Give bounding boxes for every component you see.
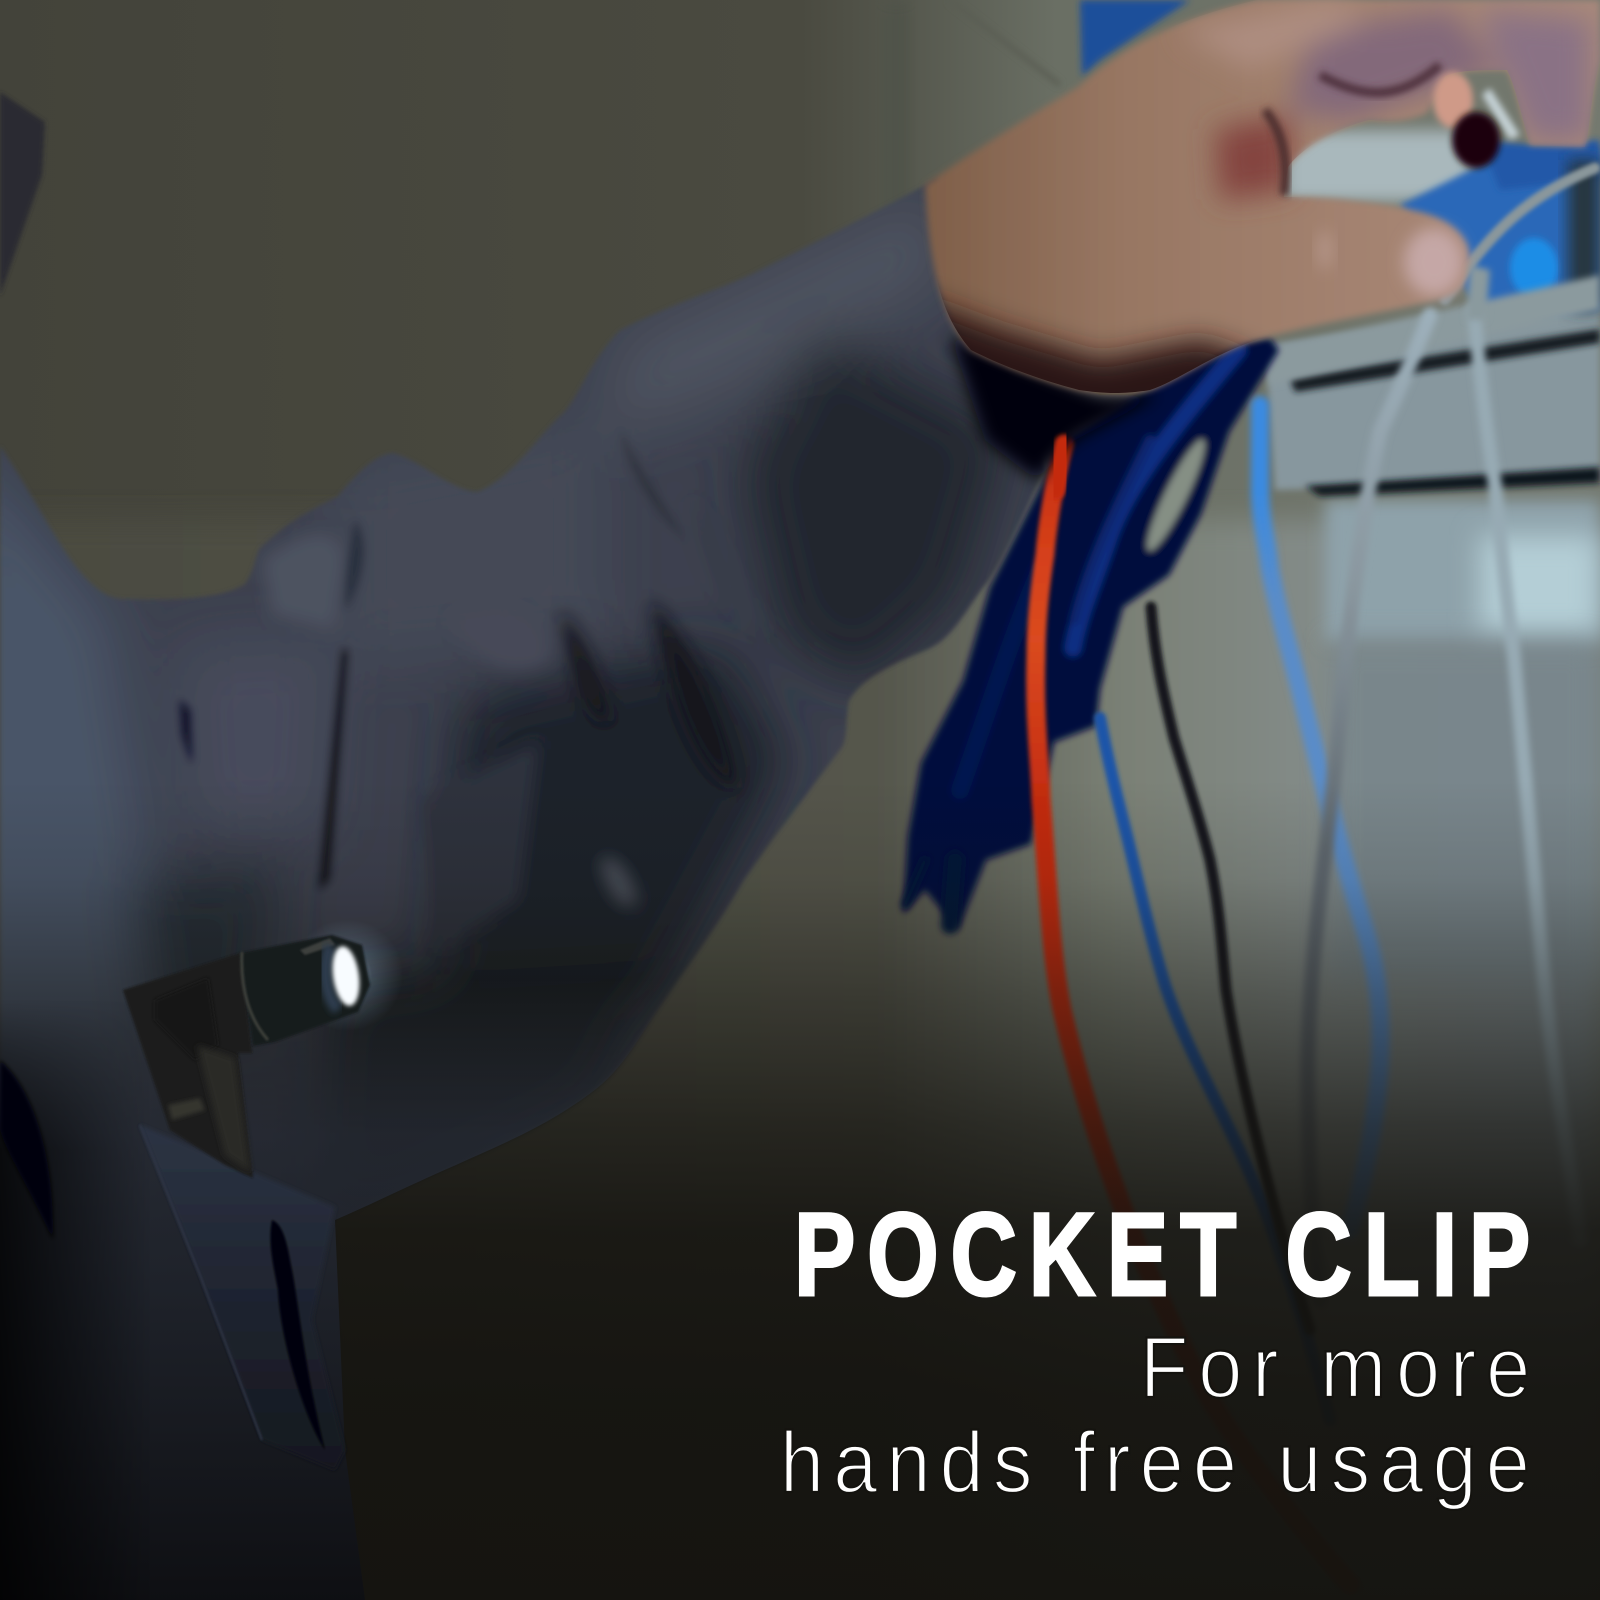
clip body <box>123 953 253 1178</box>
flashlight with pocket clip <box>123 919 403 1178</box>
pocket: dark slit <box>270 1220 325 1450</box>
shirt pocket <box>0 1060 345 1470</box>
sleeve fold details <box>262 534 736 930</box>
left edge vignette <box>0 1027 119 1600</box>
sleeve soft shading <box>0 196 1026 1100</box>
subheading line: For more: For more <box>1140 1319 1530 1416</box>
pocket: seam <box>140 1125 262 1440</box>
cable connector strain relief <box>1466 265 1490 320</box>
lens <box>329 944 363 1008</box>
cable: blue bundle <box>903 338 1279 930</box>
left black fold <box>0 1060 53 1240</box>
figure: shirt and sleeve <box>0 185 1044 1116</box>
hand: dark fingernail shadow <box>1452 112 1500 168</box>
cable: red <box>1036 444 1350 1585</box>
cable: light blue <box>1260 405 1381 1230</box>
heading and subheading text <box>780 1189 1530 1511</box>
rack: bottom dark edge <box>1305 467 1600 496</box>
light glow <box>291 919 403 1031</box>
cable: grey right <box>1474 310 1580 1240</box>
shadow under cuff <box>950 335 1160 480</box>
cable: red over shadow <box>1056 444 1064 490</box>
light barrel <box>240 935 370 1046</box>
hand: tone patches <box>940 0 1596 393</box>
subheading line: hands free usage: hands free usage <box>780 1414 1530 1511</box>
hand: finger creases <box>1320 65 1440 93</box>
hand: fingertip <box>1433 72 1473 128</box>
cable: blue thin <box>1100 718 1330 1420</box>
cable: black <box>1151 607 1310 1330</box>
hand: white gap <box>1482 88 1520 140</box>
cable: grey upper loop <box>1445 168 1595 300</box>
rack: top dark edge <box>1290 329 1600 392</box>
heading: POCKET CLIP: POCKET CLIP <box>794 1189 1530 1321</box>
cable: grey left <box>1308 315 1430 1300</box>
cable: blue bundle frayed ends <box>905 860 955 925</box>
shirt tint restored under the fade <box>24 1031 627 1522</box>
global bottom fade over the photo <box>0 780 1600 1600</box>
equipment rack at top right <box>1080 0 1600 980</box>
hand: thumb knuckle highlight <box>1317 230 1333 270</box>
cables <box>903 168 1595 1585</box>
hand <box>920 0 1600 430</box>
hand: thumb nail <box>1404 228 1464 296</box>
dark collar top left <box>0 92 45 296</box>
